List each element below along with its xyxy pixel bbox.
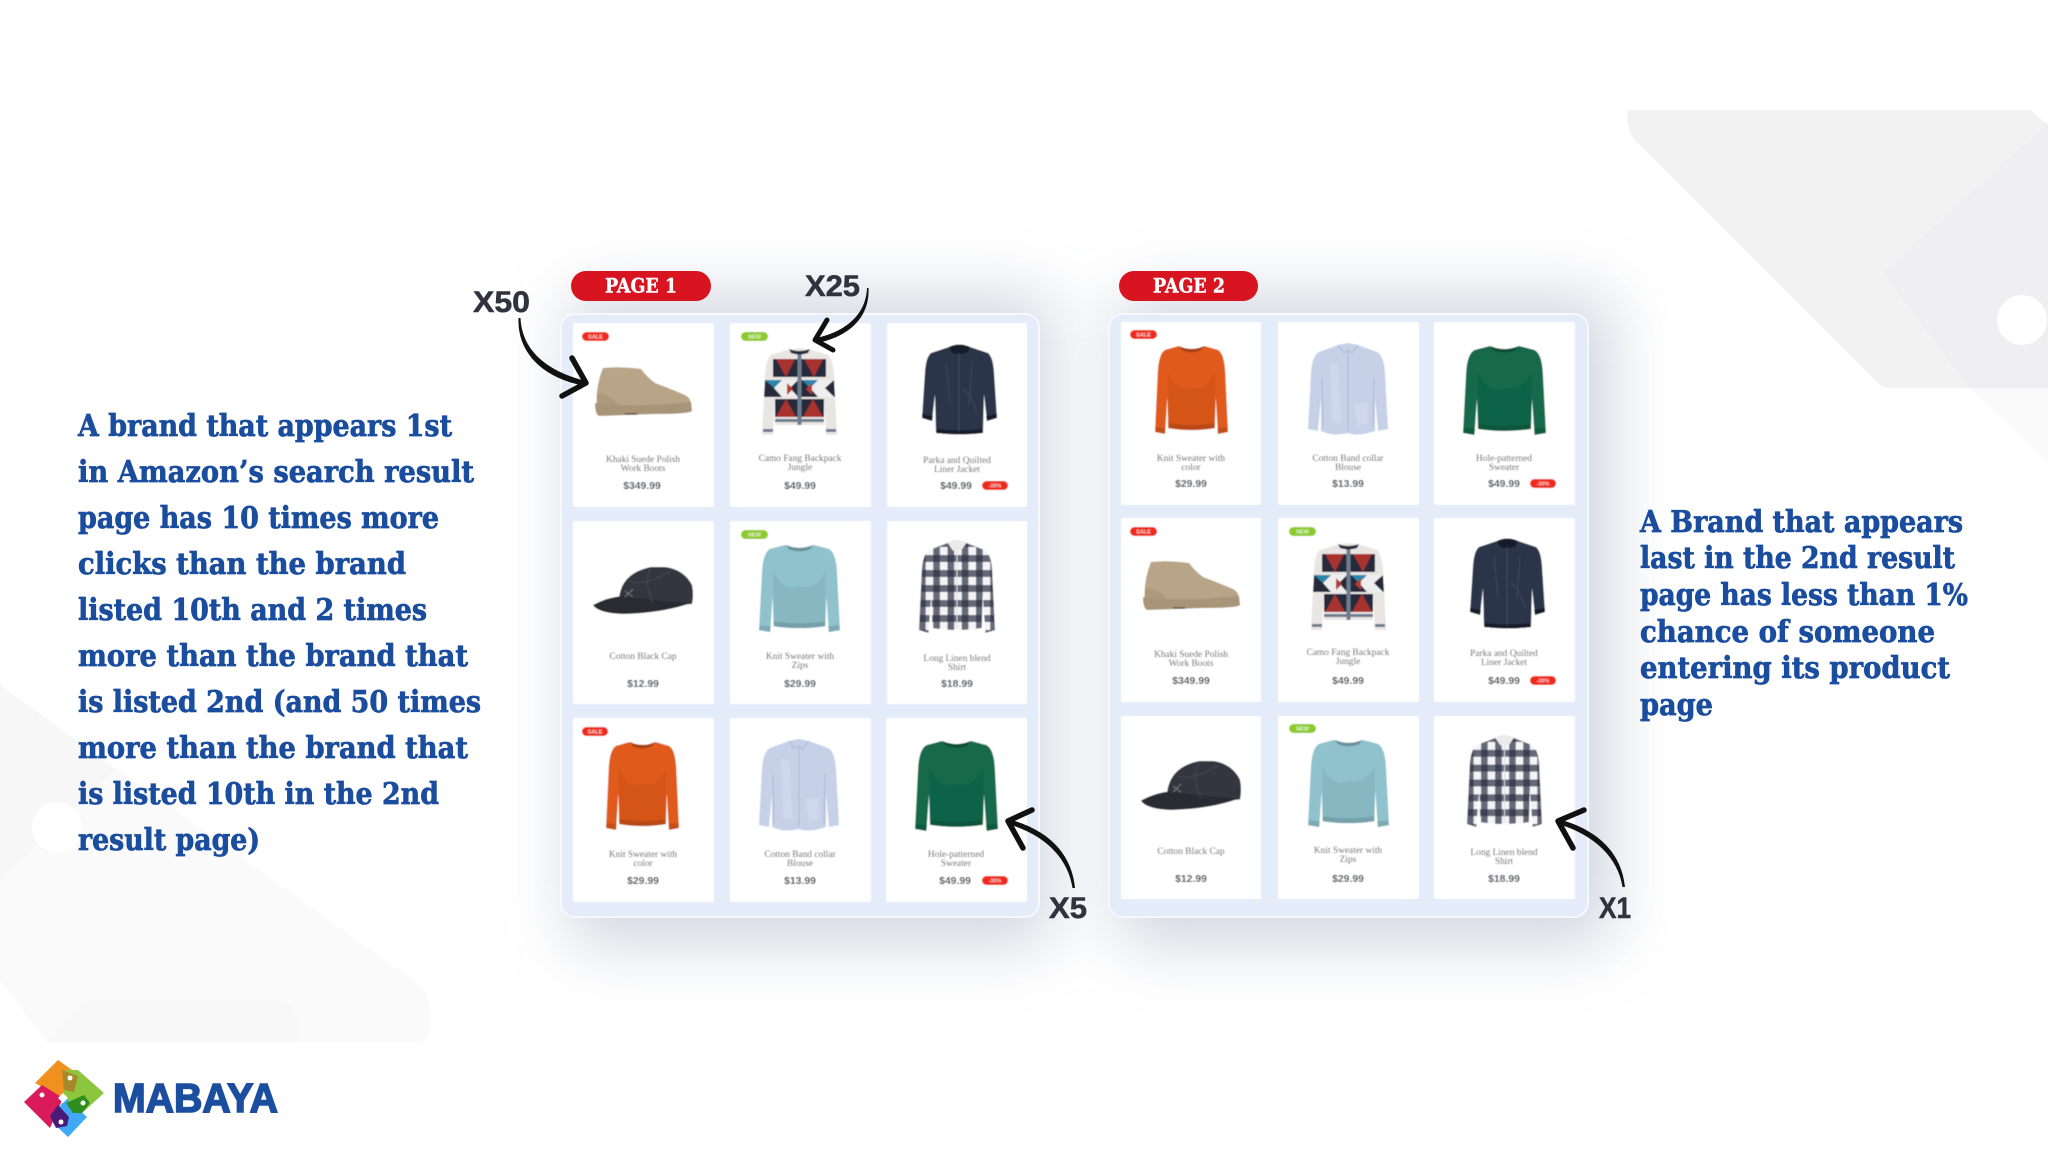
logo: Mabaya — [24, 1060, 278, 1137]
card: orange sweater: color — [1181, 463, 1202, 473]
panel: page 2 product grid — [1109, 314, 1588, 917]
card: plaid shirt: Shirt — [1495, 857, 1514, 867]
left text block: more than the brand that — [78, 638, 468, 673]
card: orange sweater: Knit Sweater with — [609, 850, 677, 860]
card: orange sweater — [573, 718, 714, 902]
left text block: clicks than the brand — [78, 546, 406, 581]
card: blue sweater: $29.99 — [784, 679, 816, 690]
arrow: X5 to last result of page 1 — [1008, 810, 1075, 888]
card: black cap — [1121, 716, 1261, 899]
card: green sweater: -30% — [989, 878, 1002, 884]
card: black cap: $12.99 — [627, 679, 659, 690]
card: green sweater: Hole-patterned — [1476, 454, 1532, 464]
card: patterned cardigan — [1278, 518, 1419, 702]
card: patterned cardigan — [730, 323, 871, 507]
card: green sweater: Sweater — [1489, 463, 1520, 473]
card: patterned cardigan: Camo Fang Backpack — [1307, 648, 1390, 658]
right text block: A Brand that appears — [1639, 504, 1963, 539]
card: oxford shirt — [1278, 322, 1419, 505]
card: plaid shirt: Shirt — [948, 663, 967, 673]
card: orange sweater: Knit Sweater with — [1157, 454, 1225, 464]
card: khaki boots: Khaki Suede Polish — [1154, 650, 1228, 660]
card: khaki boots: $349.99 — [1172, 676, 1210, 687]
card: black cap: Cotton Black Cap — [609, 652, 677, 662]
card: orange sweater: SALE — [588, 730, 603, 736]
card: khaki boots — [1121, 518, 1261, 702]
card: parka jacket: Liner Jacket — [1481, 658, 1527, 668]
card: blue sweater: Knit Sweater with — [1314, 846, 1382, 856]
card: oxford shirt: Cotton Band collar — [764, 850, 837, 860]
pill: page 2: PAGE 2 — [1153, 274, 1225, 298]
card: blue sweater: Knit Sweater with — [766, 652, 834, 662]
right text block: chance of someone — [1640, 614, 1935, 649]
card: parka jacket: -30% — [1537, 678, 1550, 684]
card: blue sweater — [1278, 716, 1419, 899]
card: green sweater — [1434, 322, 1575, 505]
card: khaki boots — [573, 323, 714, 507]
card: green sweater: -30% — [1537, 482, 1550, 488]
arrow: X1 to last result of page 2 — [1558, 810, 1625, 887]
card: khaki boots: Work Boots — [1169, 659, 1214, 669]
label: X1: X1 — [1599, 892, 1631, 925]
card: oxford shirt: Blouse — [787, 859, 813, 869]
card: khaki boots: Khaki Suede Polish — [606, 455, 680, 465]
card: parka jacket: -30% — [989, 484, 1002, 490]
card: blue sweater — [730, 521, 871, 704]
left text block — [77, 408, 481, 857]
card: orange sweater: SALE — [1136, 332, 1151, 338]
card: plaid shirt: Long Linen blend — [923, 654, 991, 664]
arrow: X50 to first result — [518, 318, 586, 396]
card: parka jacket: Parka and Quilted — [1470, 649, 1538, 659]
panel shadows — [570, 295, 1612, 945]
card: patterned cardigan: Jungle — [1336, 657, 1360, 667]
card: khaki boots: $349.99 — [623, 481, 661, 492]
card: parka jacket: $49.99 — [940, 481, 972, 492]
arrow: X25 to second result — [815, 288, 869, 350]
card: patterned cardigan: NEW — [1296, 530, 1310, 536]
card: plaid shirt: $18.99 — [941, 679, 973, 690]
icon: four-colour tag diamond — [24, 1060, 104, 1137]
label: X5: X5 — [1049, 892, 1087, 925]
pill: page 1: PAGE 1 — [605, 274, 677, 298]
left text block: result page) — [78, 822, 260, 857]
card: patterned cardigan: $49.99 — [1332, 676, 1364, 687]
card: blue sweater: NEW — [748, 532, 762, 538]
card: black cap: $12.99 — [1175, 874, 1207, 885]
right text block: last in the 2nd result — [1640, 540, 1955, 575]
card: khaki boots: SALE — [1136, 530, 1151, 536]
card: plaid shirt — [887, 521, 1027, 704]
card: green sweater — [886, 718, 1027, 902]
card: oxford shirt: Cotton Band collar — [1312, 454, 1385, 464]
card: patterned cardigan: $49.99 — [784, 481, 816, 492]
pill: page 1 — [571, 271, 711, 301]
card: oxford shirt: $13.99 — [1332, 479, 1364, 490]
card: parka jacket: Parka and Quilted — [923, 456, 991, 466]
card: plaid shirt: $18.99 — [1488, 874, 1520, 885]
card: orange sweater: color — [633, 859, 654, 869]
card: plaid shirt — [1434, 716, 1575, 899]
background shape: bottom left tag — [0, 685, 430, 1042]
card: parka jacket: $49.99 — [1488, 676, 1520, 687]
panel: page 1 product grid — [561, 314, 1039, 917]
card: parka jacket — [1434, 518, 1575, 702]
right text block: page has less than 1% — [1640, 577, 1968, 612]
left text block: A brand that appears 1st — [77, 408, 452, 443]
label: X50: X50 — [473, 286, 530, 319]
left text block: more than the brand that — [78, 730, 468, 765]
card: oxford shirt — [730, 718, 871, 902]
card: parka jacket: Liner Jacket — [934, 465, 980, 475]
card: green sweater: $49.99 — [1488, 479, 1520, 490]
card: patterned cardigan: Camo Fang Backpack — [759, 454, 842, 464]
left text block: page has 10 times more — [78, 500, 439, 535]
left text block: in Amazon’s search result — [78, 454, 474, 489]
left text block: is listed 2nd (and 50 times — [78, 684, 481, 719]
card: khaki boots: Work Boots — [621, 464, 666, 474]
card: orange sweater: $29.99 — [627, 876, 659, 887]
card: patterned cardigan: NEW — [748, 334, 762, 340]
card: oxford shirt: $13.99 — [784, 876, 816, 887]
right text block: entering its product — [1640, 650, 1950, 685]
card: green sweater: $49.99 — [939, 876, 971, 887]
card: blue sweater: Zips — [1340, 855, 1357, 865]
right text block: page — [1640, 687, 1713, 722]
card: orange sweater — [1121, 322, 1261, 505]
background shape: top right tag — [1627, 110, 2048, 462]
left text block: is listed 10th in the 2nd — [78, 776, 439, 811]
card: blue sweater: NEW — [1296, 726, 1310, 732]
pill: page 2 — [1119, 271, 1258, 301]
left text block: listed 10th and 2 times — [78, 592, 427, 627]
card: parka jacket — [887, 323, 1027, 507]
wordmark: MABAYA — [113, 1075, 278, 1121]
card: black cap: Cotton Black Cap — [1157, 847, 1225, 857]
card: blue sweater: Zips — [792, 661, 809, 671]
card: oxford shirt: Blouse — [1335, 463, 1361, 473]
card: plaid shirt: Long Linen blend — [1470, 848, 1538, 858]
card: khaki boots: SALE — [588, 334, 603, 340]
card: green sweater: Sweater — [941, 859, 972, 869]
card: orange sweater: $29.99 — [1175, 479, 1207, 490]
card: black cap — [573, 521, 714, 704]
card: blue sweater: $29.99 — [1332, 874, 1364, 885]
label: X25: X25 — [805, 270, 860, 303]
right text block — [1639, 504, 1968, 722]
card: green sweater: Hole-patterned — [928, 850, 984, 860]
card: patterned cardigan: Jungle — [788, 463, 812, 473]
